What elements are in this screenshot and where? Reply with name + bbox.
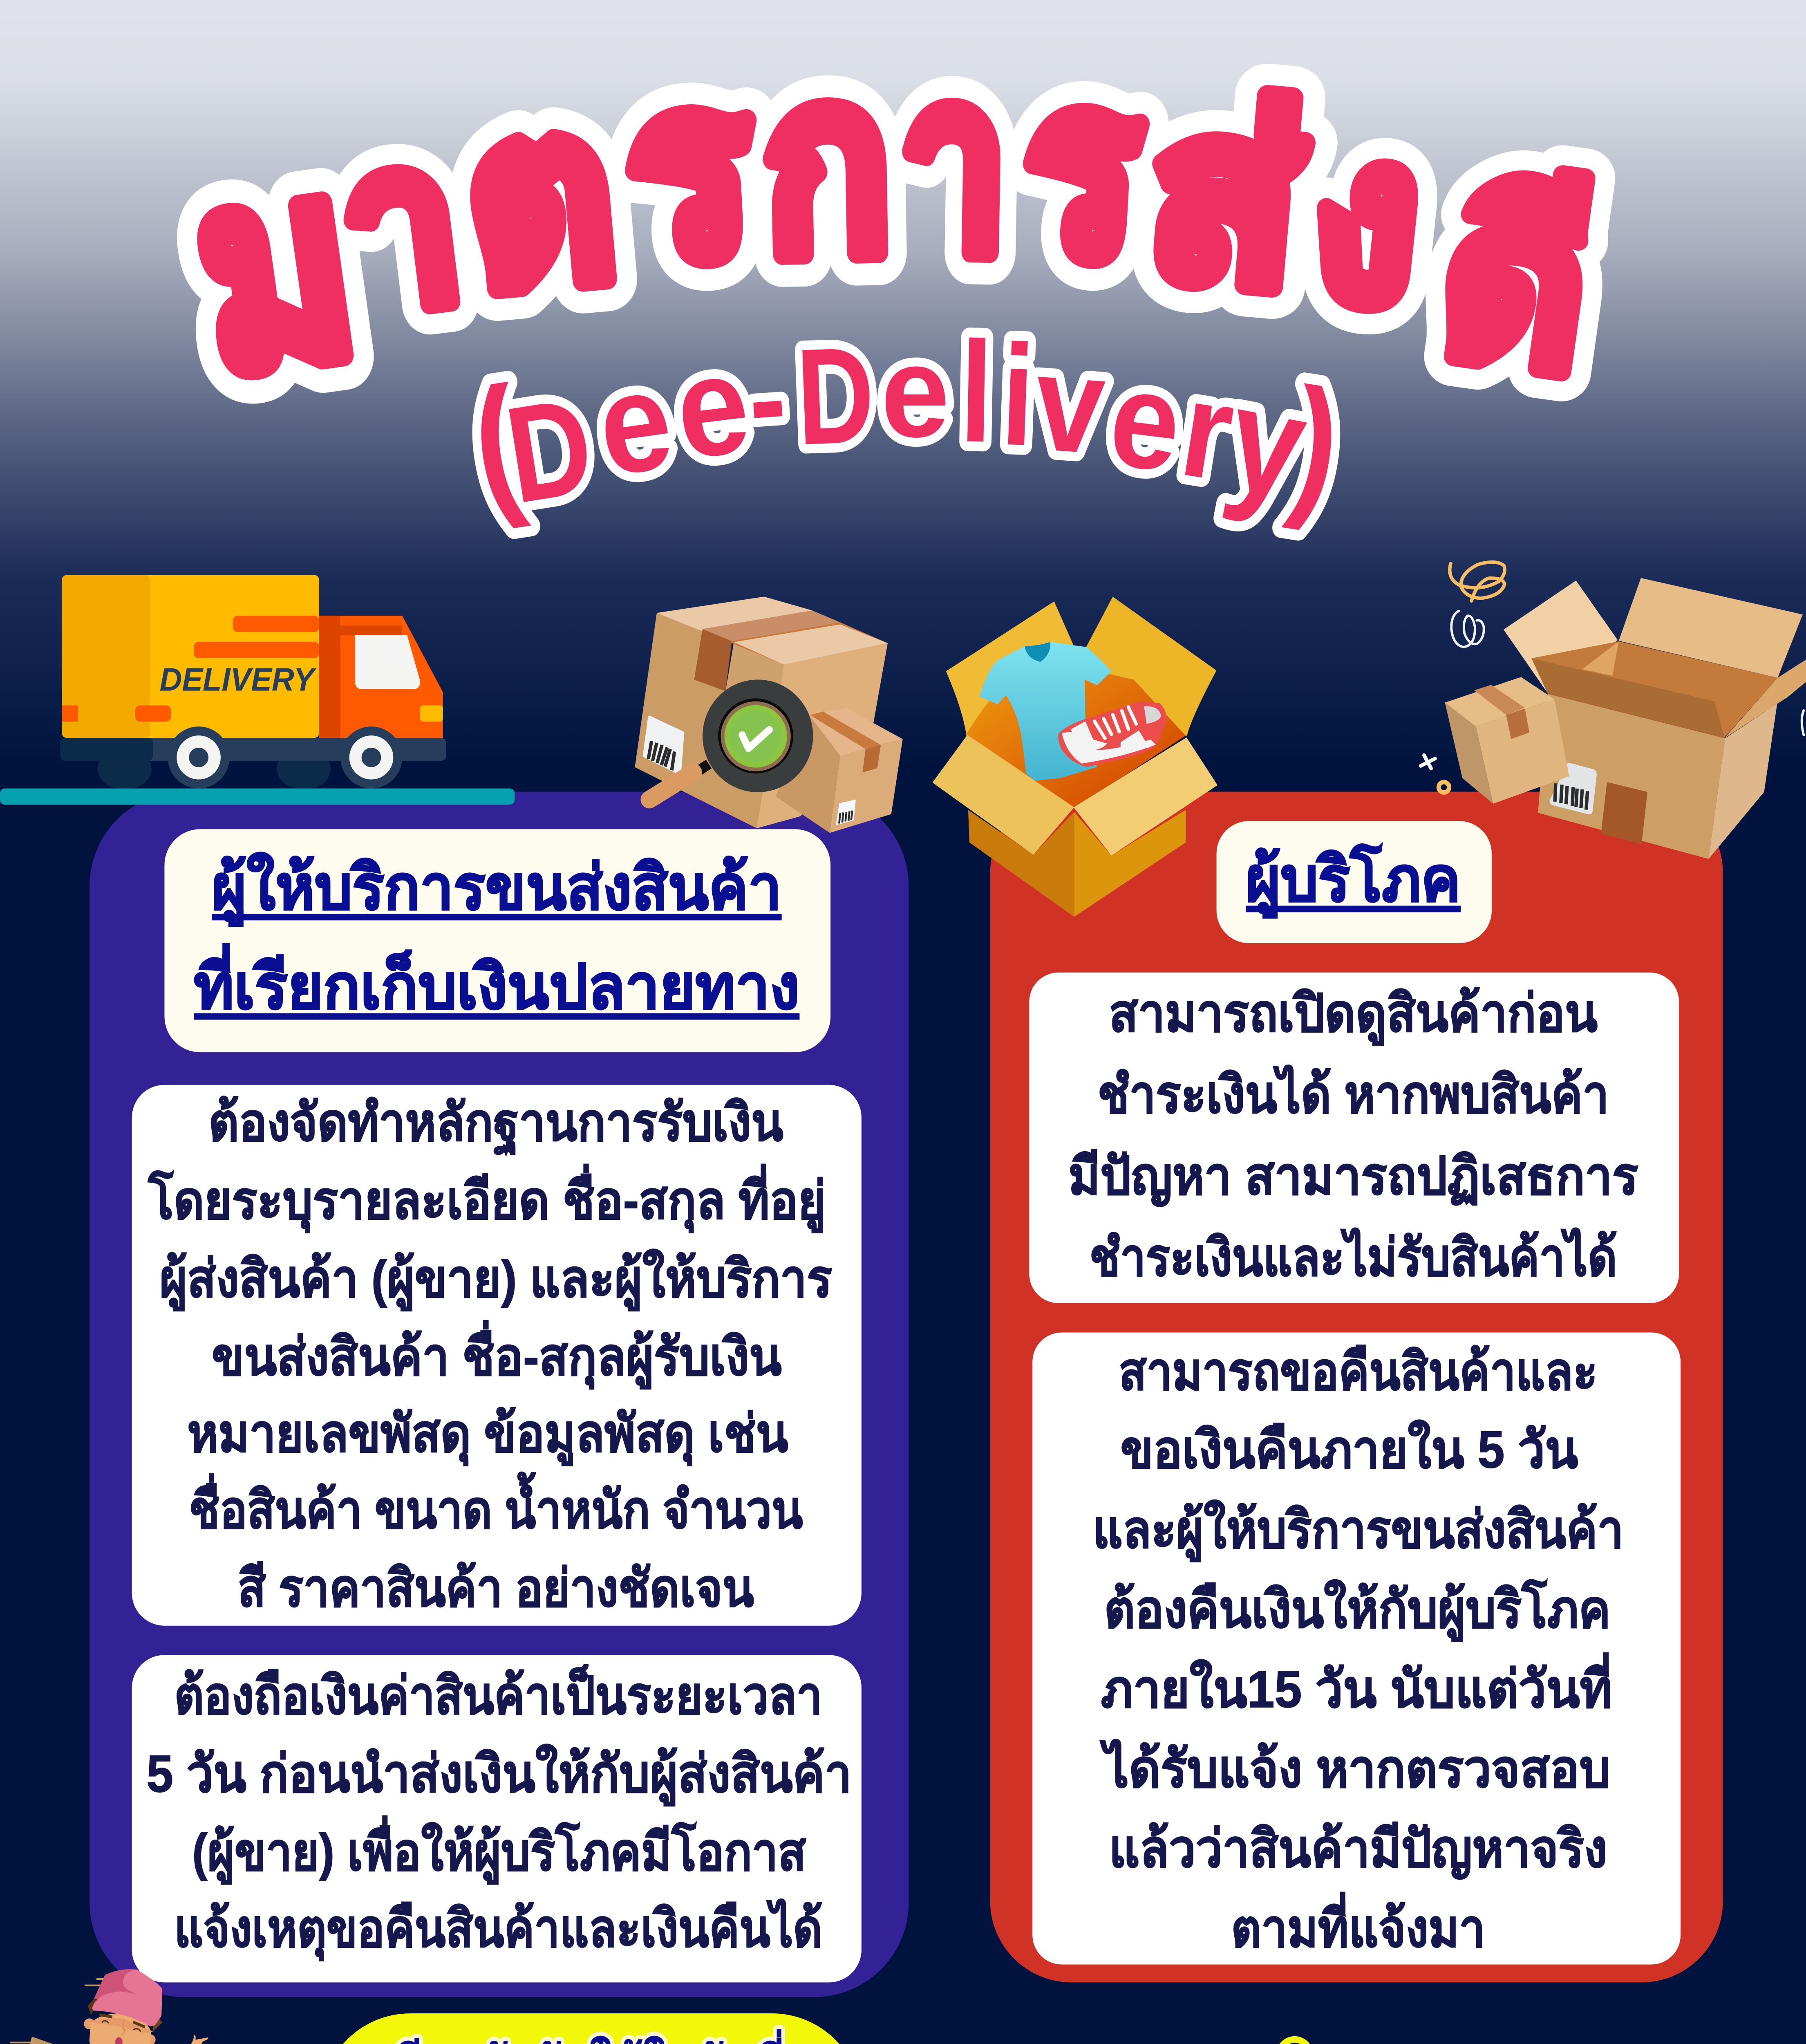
title: ม (183, 114, 369, 424)
subtitle: e (667, 323, 757, 489)
title: ร (621, 33, 758, 309)
panel: consumers (990, 792, 1723, 1982)
title (183, 27, 1603, 424)
subtitle: ) (1281, 355, 1351, 536)
text block: returns and refunds: ต้องคืนเงินให้กับผู้บริโภค (1104, 1579, 1611, 1642)
text block: receipt evidence: ชื่อสินค้า ขนาด น้ำหนัก จำนวน (189, 1472, 803, 1540)
text block: receipt evidence (132, 1085, 862, 1626)
subtitle: y (1215, 354, 1319, 533)
text block: receipt evidence: ผู้ส่งสินค้า (ผู้ขาย) และผู้ให้บริการ (159, 1249, 832, 1311)
title: ร (1018, 32, 1146, 307)
subtitle: e (589, 339, 681, 505)
title: า (899, 29, 1009, 300)
subtitle: ( (461, 353, 533, 534)
text block: returns and refunds (1032, 1332, 1681, 1965)
subtitle: D (794, 318, 877, 473)
title: ส่ (1139, 59, 1311, 335)
subtitle: ) (1281, 355, 1351, 536)
text block: returns and refunds: และผู้ให้บริการขนส่งสินค้า (1093, 1500, 1624, 1562)
text block: returns and refunds: ขอเงินคืนภายใน 5 วัน (1120, 1420, 1578, 1479)
title: ร (1018, 32, 1146, 307)
icon: delivery truck: DELIVERY (159, 661, 317, 698)
subtitle: l (959, 312, 994, 472)
subtitle: i (999, 314, 1037, 476)
panel heading: providers: ผู้ให้บริการขนส่งสินค้า (212, 852, 782, 926)
subtitle: D (794, 318, 877, 473)
title: า (329, 94, 472, 357)
subtitle: e (881, 319, 950, 464)
title: ร (621, 33, 758, 309)
road bar (0, 789, 515, 805)
title: ดี (1428, 152, 1603, 417)
panel heading: providers: ที่เรียกเก็บเงินปลายทาง (194, 944, 799, 1022)
subtitle: v (1030, 325, 1110, 483)
icon: boxes with magnifier (635, 597, 903, 833)
text block: inspect before paying (1029, 973, 1679, 1303)
panel heading: providers (164, 829, 830, 1052)
subtitle: - (744, 324, 790, 472)
text block: returns and refunds: ตามที่แจ้งมา (1231, 1892, 1485, 1958)
title: า (899, 29, 1009, 300)
subtitle: - (744, 324, 790, 472)
title: ต (456, 57, 624, 338)
text block: holding payment: แจ้งเหตุขอคืนสินค้าและเงินคืนได้ (174, 1899, 822, 1961)
text block: receipt evidence: โดยระบุรายละเอียด ชื่อ-สกุล ที่อยู่ (148, 1164, 826, 1233)
subtitle: D (497, 368, 602, 532)
text block: returns and refunds: ได้รับแจ้ง หากตรวจสอบ (1099, 1739, 1611, 1798)
date callout (321, 2013, 862, 2044)
subtitle: l (959, 312, 994, 472)
subtitle: r (1172, 351, 1243, 510)
title: า (329, 94, 472, 357)
text block: receipt evidence: หมายเลขพัสดุ ข้อมูลพัสดุ เช่น (187, 1405, 788, 1466)
icon: open box with shirt and shoe (933, 597, 1217, 917)
text block: receipt evidence: ต้องจัดทำหลักฐานการรับเงิน (208, 1094, 783, 1156)
text block: holding payment (132, 1655, 862, 1982)
subtitle: ( (461, 353, 533, 534)
text block: holding payment: ต้องถือเงินค่าสินค้าเป็นระยะเวลา (174, 1664, 822, 1725)
subtitle: e (667, 323, 757, 489)
text block: inspect before paying: สามารถเปิดดูสินค้าก่อน (1109, 984, 1598, 1046)
title: ส่ (1139, 59, 1311, 335)
text block: holding payment: 5 วัน ก่อนนำส่งเงินให้กับผู้ส่งสินค้า (147, 1744, 852, 1806)
subtitle: v (1030, 325, 1110, 483)
text block: returns and refunds: แล้วว่าสินค้ามีปัญหาจริง (1109, 1820, 1607, 1880)
illustration: scooter rider (1, 1969, 252, 2044)
text block: receipt evidence: ขนส่งสินค้า ชื่อ-สกุลผู้รับเงิน (212, 1320, 782, 1390)
title: ต (456, 57, 624, 338)
subtitle: r (1172, 351, 1243, 510)
subtitle: e (1102, 341, 1189, 501)
icon: delivery truck (60, 575, 446, 789)
subtitle: e (589, 339, 681, 505)
text block: receipt evidence: สี ราคาสินค้า อย่างชัดเจน (238, 1560, 754, 1618)
text block: returns and refunds: ภายใน15 วัน นับแต่วันที่ (1101, 1653, 1612, 1719)
panel: service providers (90, 792, 909, 1997)
subtitle: y (1215, 354, 1319, 533)
subtitle: e (881, 319, 950, 464)
text block: inspect before paying: มีปัญหา สามารถปฏิเสธการ (1068, 1148, 1638, 1207)
icon: open cardboard box with small parcel (1421, 562, 1806, 859)
text block: inspect before paying: ชำระเงินได้ หากพบสินค้า (1098, 1065, 1609, 1124)
panel heading: consumers: ผู้บริโภค (1246, 844, 1461, 918)
title: ก (763, 27, 893, 303)
text block: returns and refunds: สามารถขอคืนสินค้าและ (1119, 1343, 1598, 1401)
title: ดี (1428, 152, 1603, 417)
subtitle (461, 312, 1351, 536)
subtitle: D (497, 368, 602, 532)
text block: holding payment: (ผู้ขาย) เพื่อให้ผู้บริโภคมีโอกาส (192, 1815, 806, 1885)
subtitle: e (1102, 341, 1189, 501)
title: ง (1302, 88, 1431, 352)
route with location pins (893, 2036, 1576, 2044)
panel heading: consumers (1217, 821, 1492, 943)
text block: inspect before paying: ชำระเงินและไม่รับสินค้าได้ (1090, 1228, 1617, 1287)
title: ง (1302, 88, 1431, 352)
subtitle: i (999, 314, 1037, 476)
title: ก (763, 27, 893, 303)
title: ม (183, 114, 369, 424)
